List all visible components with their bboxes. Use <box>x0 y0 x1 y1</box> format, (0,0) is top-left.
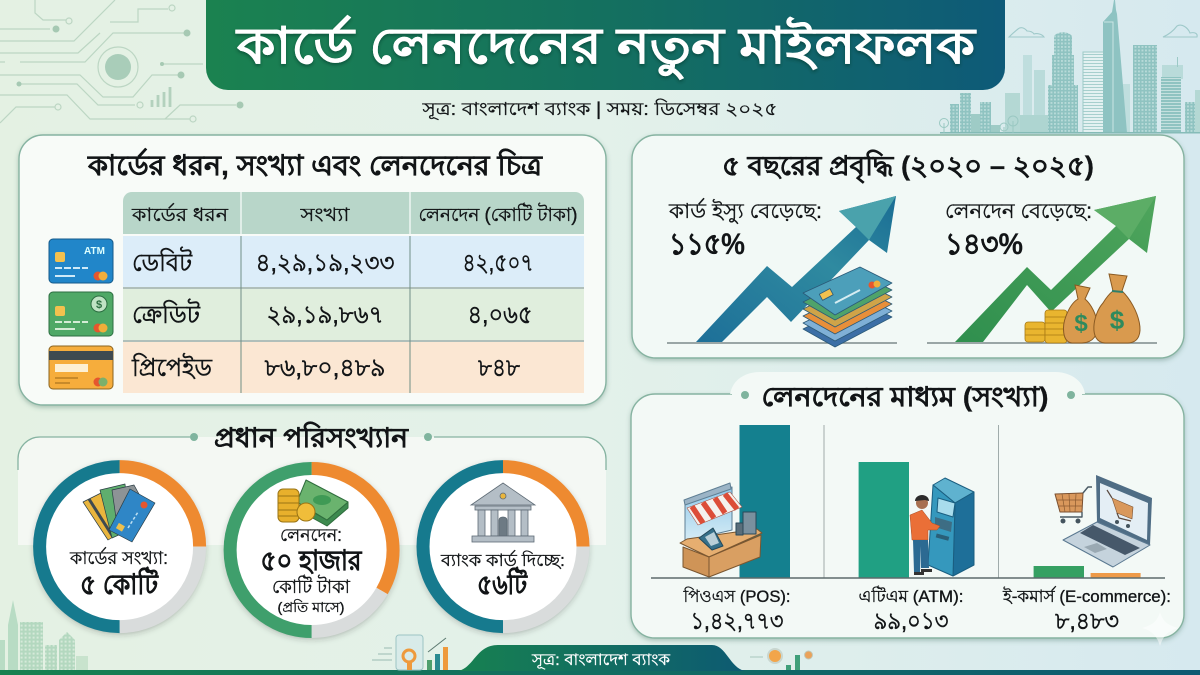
stat: transaction growth <box>945 200 1092 261</box>
stat circle: transactions: (প্রতি মাসে) <box>278 599 344 615</box>
bar: e-commerce green <box>1034 566 1084 578</box>
footer bar <box>0 645 1200 675</box>
icon: gear and bars decoration <box>750 649 812 670</box>
panel: transaction channels <box>631 372 1184 638</box>
icon: prepaid card <box>49 346 113 389</box>
footer source text: সূত্র: বাংলাদেশ ব্যাংক <box>531 652 671 670</box>
row: debit: ডেবিট <box>132 247 192 277</box>
panel: key statistics <box>18 421 606 638</box>
row: prepaid <box>123 342 584 393</box>
stat circle: banks: ৫৬টি <box>477 566 528 600</box>
row: credit: ২৯,১৯,৮৬৭ <box>266 301 384 329</box>
stat circle: transactions: কোটি টাকা <box>272 575 350 598</box>
stat circle: banks <box>417 461 589 633</box>
row: debit: ৪,২৯,১৯,২৩৩ <box>256 249 394 277</box>
clouds <box>1009 25 1197 37</box>
circuit decoration <box>0 0 244 123</box>
stat circle: number of cards: ৫ কোটি <box>80 566 160 600</box>
table header: সংখ্যা <box>299 205 350 226</box>
row: debit <box>123 236 584 287</box>
skyline bottom left <box>0 600 88 670</box>
stat circle: number of cards <box>34 461 206 633</box>
stat: card issue growth: ১১৫% <box>669 228 745 261</box>
row: prepaid: ৮৬,৮০,৪৮৯ <box>264 354 386 382</box>
table header: লেনদেন (কোটি টাকা) <box>418 203 578 226</box>
icon: debit card <box>49 239 113 283</box>
panel: five year growth <box>632 135 1184 358</box>
label: e-commerce: ৮,৪৮৩ <box>1055 608 1119 635</box>
bar: ATM <box>859 462 909 578</box>
label: ATM: এটিএম (ATM): <box>858 586 964 606</box>
icon: coins and money bags <box>1025 274 1140 343</box>
stat circle: transactions: লেনদেন: <box>280 525 342 545</box>
bar: e-commerce orange <box>1091 573 1141 578</box>
bar: POS <box>740 425 790 578</box>
stat circle: number of cards: কার্ডের সংখ্যা: <box>69 547 168 568</box>
icon: coins and banknotes <box>278 480 348 526</box>
watermark sparkle <box>1142 612 1178 646</box>
row: credit: ৪,০৬৫ <box>468 301 532 329</box>
arrow: blue growth <box>696 196 896 342</box>
stat circle: transactions <box>224 462 399 638</box>
label: e-commerce <box>1002 586 1171 635</box>
icon: shop counter <box>680 483 762 577</box>
label: POS: পিওএস (POS): <box>683 586 790 606</box>
icon: bank building <box>471 483 535 542</box>
table header <box>123 192 584 234</box>
skyline top right <box>940 0 1200 134</box>
row: debit: ৪২,৫০৭ <box>462 249 534 277</box>
stat: transaction growth: ১৪৩% <box>945 228 1023 261</box>
label: ATM: ৯৯,০১৩ <box>874 608 948 635</box>
icon: person at ATM <box>910 478 974 576</box>
icon: report and chart decoration <box>372 635 448 670</box>
icon: credit card: $ <box>96 299 102 311</box>
panel heading: প্রধান পরিসংখ্যান <box>214 421 409 453</box>
label: ATM <box>858 586 964 635</box>
stat: card issue growth: কার্ড ইস্যু বেড়েছে: <box>668 198 822 223</box>
subtitle: সূত্র: বাংলাদেশ ব্যাংক | সময়: ডিসেম্বর ২০২৫ <box>421 99 778 119</box>
icon: coins and money bags: $ <box>1074 310 1088 337</box>
panel heading: লেনদেনের মাধ্যম (সংখ্যা) <box>762 382 1048 412</box>
stat: transaction growth: লেনদেন বেড়েছে: <box>945 200 1092 223</box>
panel heading: ৫ বছরের প্রবৃদ্ধি (২০২০ – ২০২৫) <box>722 149 1094 184</box>
table header: কার্ডের ধরন <box>131 203 229 226</box>
trees <box>940 116 1018 133</box>
row: prepaid: প্রিপেইড <box>131 353 213 382</box>
icon: laptop and shopping cart <box>1055 475 1152 567</box>
row: prepaid: ৮৪৮ <box>478 354 520 382</box>
stat circle: transactions: ৫০ হাজার <box>260 545 363 576</box>
icon: card stack <box>803 267 892 347</box>
title banner <box>206 0 1005 90</box>
panel: card types table <box>19 135 606 405</box>
icon: debit card: ATM <box>84 246 105 257</box>
icon: card fan <box>83 484 155 542</box>
label: POS: ১,৪২,৭৭৩ <box>690 608 784 635</box>
stat circle: banks: ব্যাংক কার্ড দিচ্ছে: <box>440 550 565 570</box>
label: POS <box>683 586 790 635</box>
title: কার্ডে লেনদেনের নতুন মাইলফলক <box>235 14 977 81</box>
icon: credit card <box>49 292 113 336</box>
arrow: green growth <box>955 196 1156 342</box>
stat: card issue growth <box>668 198 822 261</box>
label: e-commerce: ই-কমার্স (E-commerce): <box>1002 586 1171 606</box>
row: credit <box>123 289 584 340</box>
row: credit: ক্রেডিট <box>132 299 200 329</box>
icon: coins and money bags: $ <box>1110 305 1125 335</box>
panel heading: কার্ডের ধরন, সংখ্যা এবং লেনদেনের চিত্র <box>87 148 543 181</box>
